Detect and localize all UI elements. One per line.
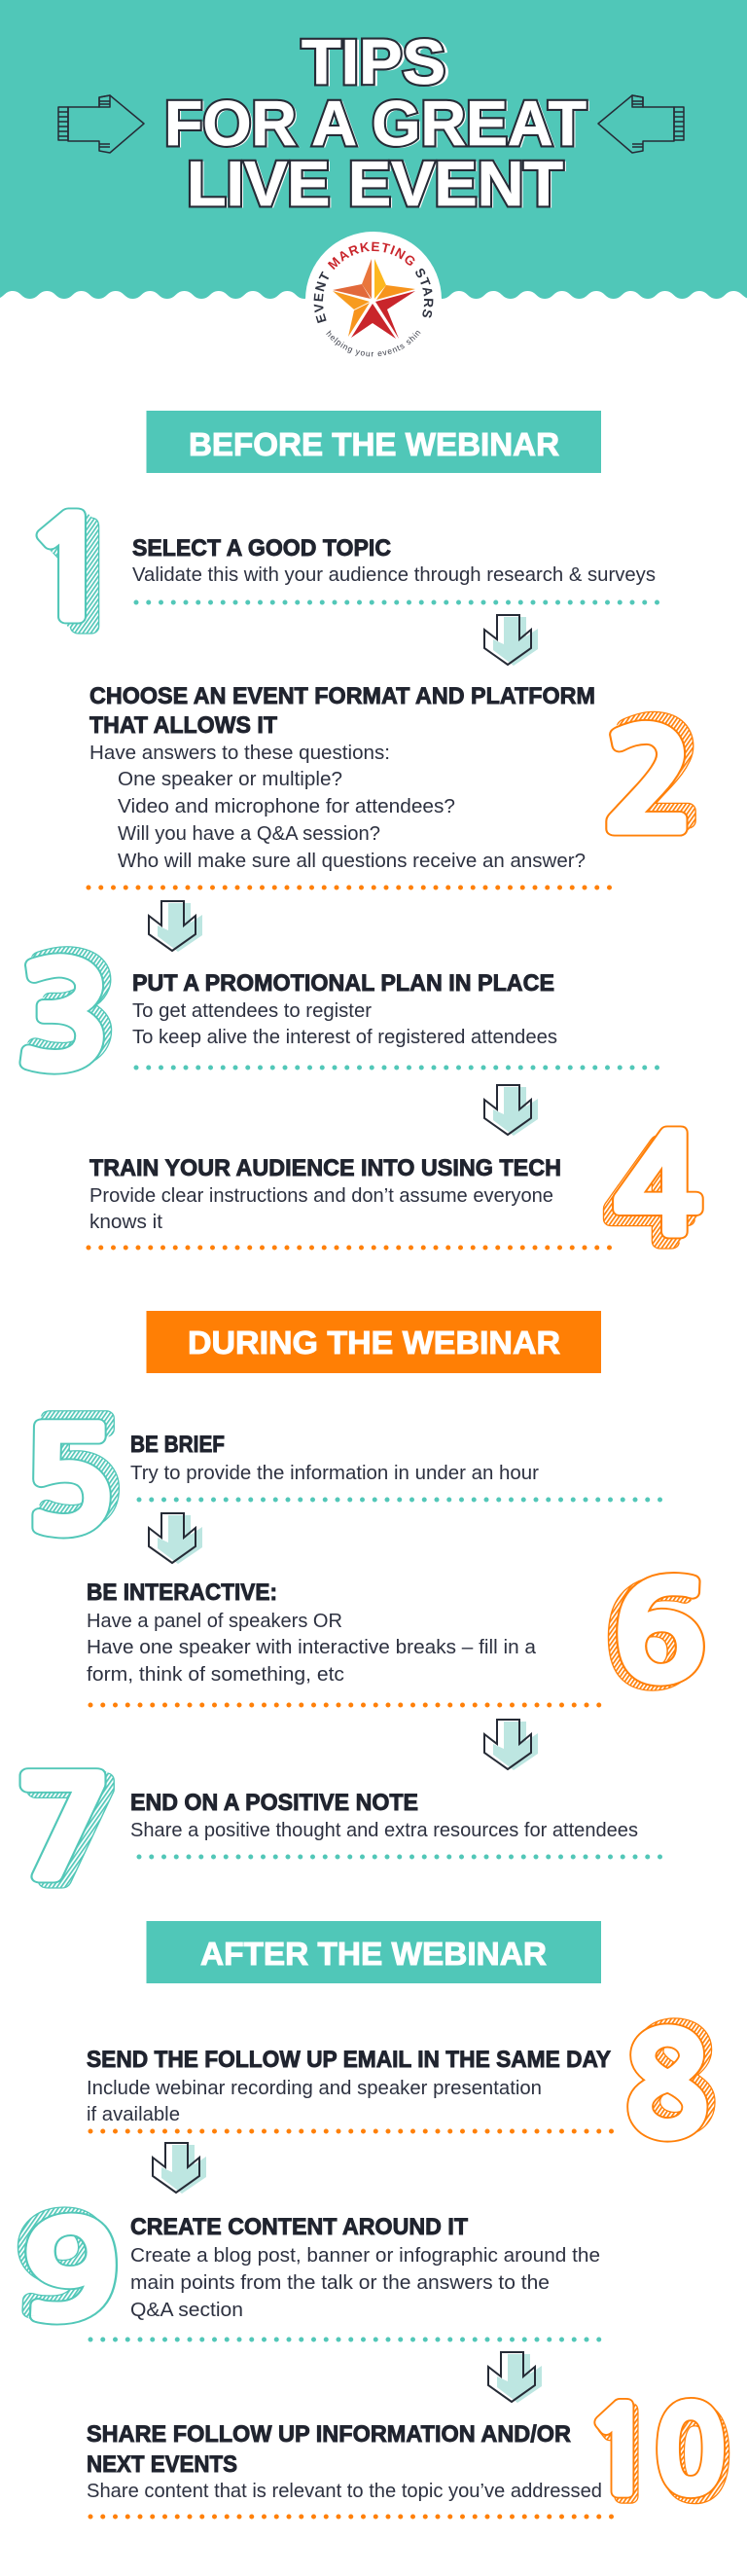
heading: END ON A POSITIVE NOTE	[130, 1790, 418, 1816]
heading: SEND THE FOLLOW UP EMAIL IN THE SAME DAY	[87, 2047, 611, 2073]
numeral 2: 2	[611, 707, 703, 844]
numeral 2: 2	[611, 707, 703, 844]
arrow down	[153, 2143, 206, 2194]
numeral 3: 3	[19, 944, 115, 1086]
numeral 7: 7	[16, 1762, 112, 1899]
arrow down	[149, 901, 202, 952]
body text	[89, 742, 586, 872]
banner: before the webinar	[146, 411, 601, 473]
numeral 2: 2	[607, 711, 699, 848]
numeral 9: 9	[16, 2203, 113, 2334]
banner: before the webinar: BEFORE THE WEBINAR	[189, 426, 559, 462]
heading: CHOOSE AN EVENT FORMAT AND PLATFORM	[89, 683, 595, 709]
body text: Provide clear instructions and don’t assume everyone	[89, 1184, 553, 1207]
body text: if available	[87, 2103, 180, 2125]
heading: CREATE CONTENT AROUND IT	[130, 2214, 468, 2240]
heading: BE BRIEF	[130, 1432, 225, 1458]
title: FOR A GREAT	[166, 89, 588, 160]
step 2	[89, 683, 703, 952]
title: LIVE EVENT	[187, 148, 563, 219]
numeral 3: 3	[23, 941, 119, 1083]
title: LIVE EVENT	[189, 149, 565, 220]
body text: Share a positive thought and extra resources for attendees	[130, 1819, 638, 1841]
numeral 2: 2	[603, 715, 695, 852]
header panel	[0, 0, 747, 356]
body text: Have a panel of speakers OR	[87, 1610, 342, 1632]
numeral 5: 5	[31, 1404, 124, 1545]
numeral 3: 3	[23, 941, 119, 1083]
numeral 7: 7	[23, 1767, 120, 1904]
step 9	[16, 2203, 600, 2403]
numeral 3: 3	[16, 947, 112, 1089]
numeral 1: 1	[35, 513, 127, 649]
body text: knows it	[89, 1211, 162, 1233]
heading	[89, 683, 595, 739]
body text	[87, 2077, 542, 2125]
icon: left pointing-right arrow	[58, 95, 144, 153]
numeral 5: 5	[31, 1404, 124, 1545]
body text	[89, 1184, 553, 1233]
body text: Have one speaker with interactive breaks – fill in a	[87, 1636, 537, 1658]
numeral 5: 5	[23, 1412, 116, 1553]
body text: One speaker or multiple?	[118, 768, 342, 790]
numeral 2: 2	[603, 715, 695, 852]
body text: Will you have a Q&A session?	[118, 822, 380, 845]
arrow down	[484, 615, 538, 666]
heading: TRAIN YOUR AUDIENCE INTO USING TECH	[89, 1155, 561, 1181]
numeral 4: 4	[615, 1120, 702, 1253]
heading: BE INTERACTIVE:	[87, 1579, 277, 1606]
numeral 1: 1	[22, 503, 115, 639]
numeral 7: 7	[23, 1767, 120, 1904]
step 10	[87, 2394, 729, 2517]
numeral 8: 8	[628, 2017, 712, 2155]
step 4	[89, 1120, 702, 1263]
title	[164, 26, 588, 220]
body text	[87, 1610, 537, 1686]
step 3	[16, 941, 661, 1136]
body text: main points from the talk or the answers to the	[130, 2271, 550, 2294]
heading: PUT A PROMOTIONAL PLAN IN PLACE	[132, 970, 554, 997]
numeral 4: 4	[615, 1120, 702, 1253]
numeral 6: 6	[605, 1573, 698, 1704]
numeral 4: 4	[610, 1125, 697, 1258]
title: TIPS	[303, 27, 449, 98]
title: FOR A GREAT	[164, 88, 587, 159]
logo tagline: helping your events shine	[326, 330, 420, 356]
step 6	[87, 1569, 706, 1770]
body text: Video and microphone for attendees?	[118, 795, 455, 817]
numeral 9: 9	[22, 2208, 120, 2339]
numeral 6: 6	[609, 1571, 702, 1702]
body text: Validate this with your audience through research & surveys	[132, 563, 656, 586]
numeral 6: 6	[613, 1569, 706, 1700]
step 8	[87, 2014, 716, 2194]
body text: Create a blog post, banner or infographic around the	[130, 2244, 600, 2267]
title: TIPS	[302, 26, 445, 97]
title: LIVE EVENT	[187, 148, 563, 219]
numeral 8: 8	[632, 2014, 716, 2152]
numeral 8: 8	[625, 2019, 709, 2157]
logo: Event Marketing Stars	[305, 232, 442, 356]
numeral 1: 1	[22, 503, 115, 639]
body text: form, think of something, etc	[87, 1663, 344, 1686]
body text	[132, 999, 557, 1048]
teal wavy background	[0, 0, 747, 299]
logo wordmark: EVENT MARKETING STARS	[313, 241, 434, 323]
step 5	[23, 1404, 664, 1564]
icon: right pointing-left arrow	[598, 95, 684, 153]
step 7	[16, 1762, 664, 1904]
body text	[130, 2244, 600, 2321]
arrow down	[149, 1513, 202, 1564]
numeral 6: 6	[605, 1573, 698, 1704]
banner: after the webinar	[146, 1921, 601, 1983]
body text: Try to provide the information in under an hour	[130, 1462, 539, 1484]
numeral 1: 1	[35, 513, 127, 649]
banner: during the webinar: DURING THE WEBINAR	[188, 1324, 560, 1361]
body text: Q&A section	[130, 2299, 243, 2321]
numeral 4: 4	[605, 1130, 693, 1263]
numeral 9: 9	[16, 2203, 113, 2334]
numeral 10: 10	[587, 2396, 728, 2512]
body text: Who will make sure all questions receive an answer?	[118, 850, 586, 872]
body text: To get attendees to register	[132, 999, 372, 1022]
arrow down	[484, 1720, 538, 1770]
body text: Include webinar recording and speaker presentation	[87, 2077, 542, 2099]
body text: To keep alive the interest of registered attendees	[132, 1026, 557, 1048]
numeral 10: 10	[588, 2399, 729, 2515]
numeral 8: 8	[625, 2019, 709, 2157]
numeral 5: 5	[23, 1412, 116, 1553]
numeral 5: 5	[27, 1408, 120, 1549]
body text: Share content that is relevant to the topic you’ve addressed	[87, 2480, 602, 2502]
numeral 7: 7	[16, 1762, 112, 1899]
heading: SELECT A GOOD TOPIC	[132, 535, 391, 562]
numeral 8: 8	[632, 2014, 716, 2152]
title: FOR A GREAT	[164, 88, 587, 159]
heading: SHARE FOLLOW UP INFORMATION AND/OR	[87, 2421, 571, 2448]
numeral 3: 3	[16, 947, 112, 1089]
arrow down	[488, 2352, 542, 2403]
title: TIPS	[302, 26, 445, 97]
banner: after the webinar: AFTER THE WEBINAR	[200, 1936, 547, 1972]
body text: Have answers to these questions:	[89, 742, 390, 764]
numeral 1: 1	[29, 508, 122, 644]
numeral 10: 10	[585, 2394, 726, 2510]
numeral 10: 10	[588, 2399, 729, 2515]
heading: NEXT EVENTS	[87, 2451, 237, 2478]
numeral 7: 7	[19, 1764, 116, 1901]
numeral 6: 6	[613, 1569, 706, 1700]
heading: THAT ALLOWS IT	[89, 712, 277, 739]
numeral 10: 10	[585, 2394, 726, 2510]
logo star	[333, 259, 415, 339]
numeral 4: 4	[605, 1130, 693, 1263]
heading	[87, 2421, 571, 2478]
numeral 9: 9	[22, 2208, 120, 2339]
banner: during the webinar	[146, 1311, 601, 1373]
step 1	[22, 503, 661, 666]
arrow down	[484, 1085, 538, 1136]
numeral 9: 9	[19, 2206, 117, 2337]
